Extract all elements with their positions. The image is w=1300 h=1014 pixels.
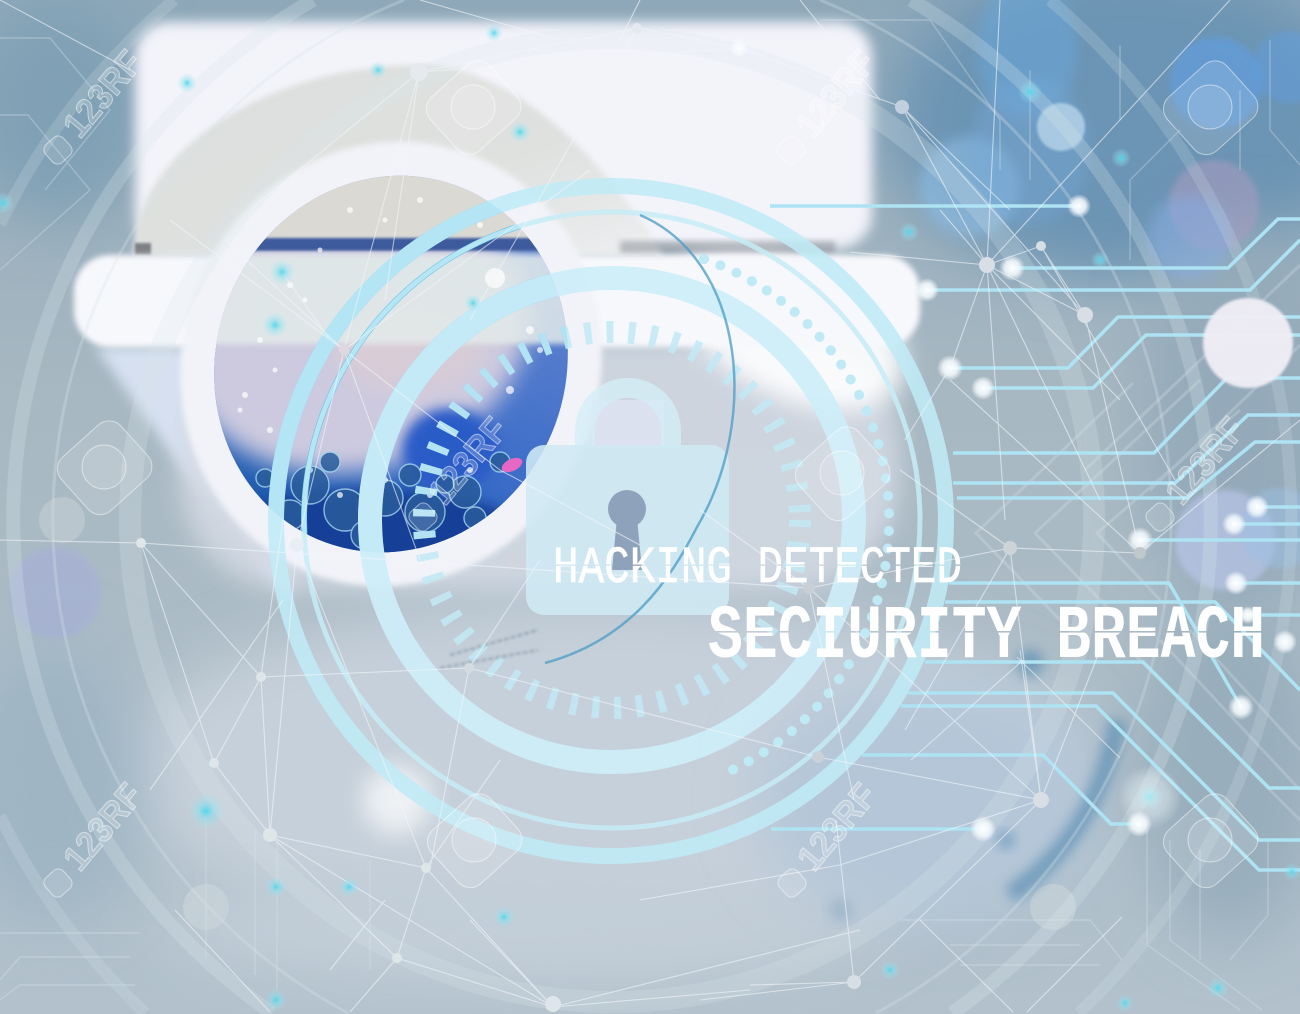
watermark stamps	[41, 54, 1264, 900]
watermarks: 123RF	[1157, 409, 1252, 512]
circuit nodes	[915, 194, 1297, 842]
chevron outlines	[976, 265, 1300, 820]
thin blue arc	[440, 215, 734, 668]
watermarks: 123RF	[420, 409, 515, 512]
icon: padlock	[526, 388, 729, 615]
watermarks	[41, 42, 1264, 900]
watermarks: 123RF	[55, 775, 150, 878]
watermarks: 123RF	[788, 42, 883, 145]
watermarks: 123RF	[55, 42, 150, 145]
security camera housing	[74, 22, 933, 600]
heading: hacking detected: HACKING DETECTED	[553, 539, 962, 598]
watermarks: 123RF	[789, 775, 884, 878]
saturated rings inside lens	[268, 201, 568, 552]
white bokeh disc	[1203, 298, 1293, 388]
camera lens	[179, 140, 604, 588]
circuit traces	[770, 206, 1300, 870]
dome shadow strokes	[829, 649, 1118, 922]
